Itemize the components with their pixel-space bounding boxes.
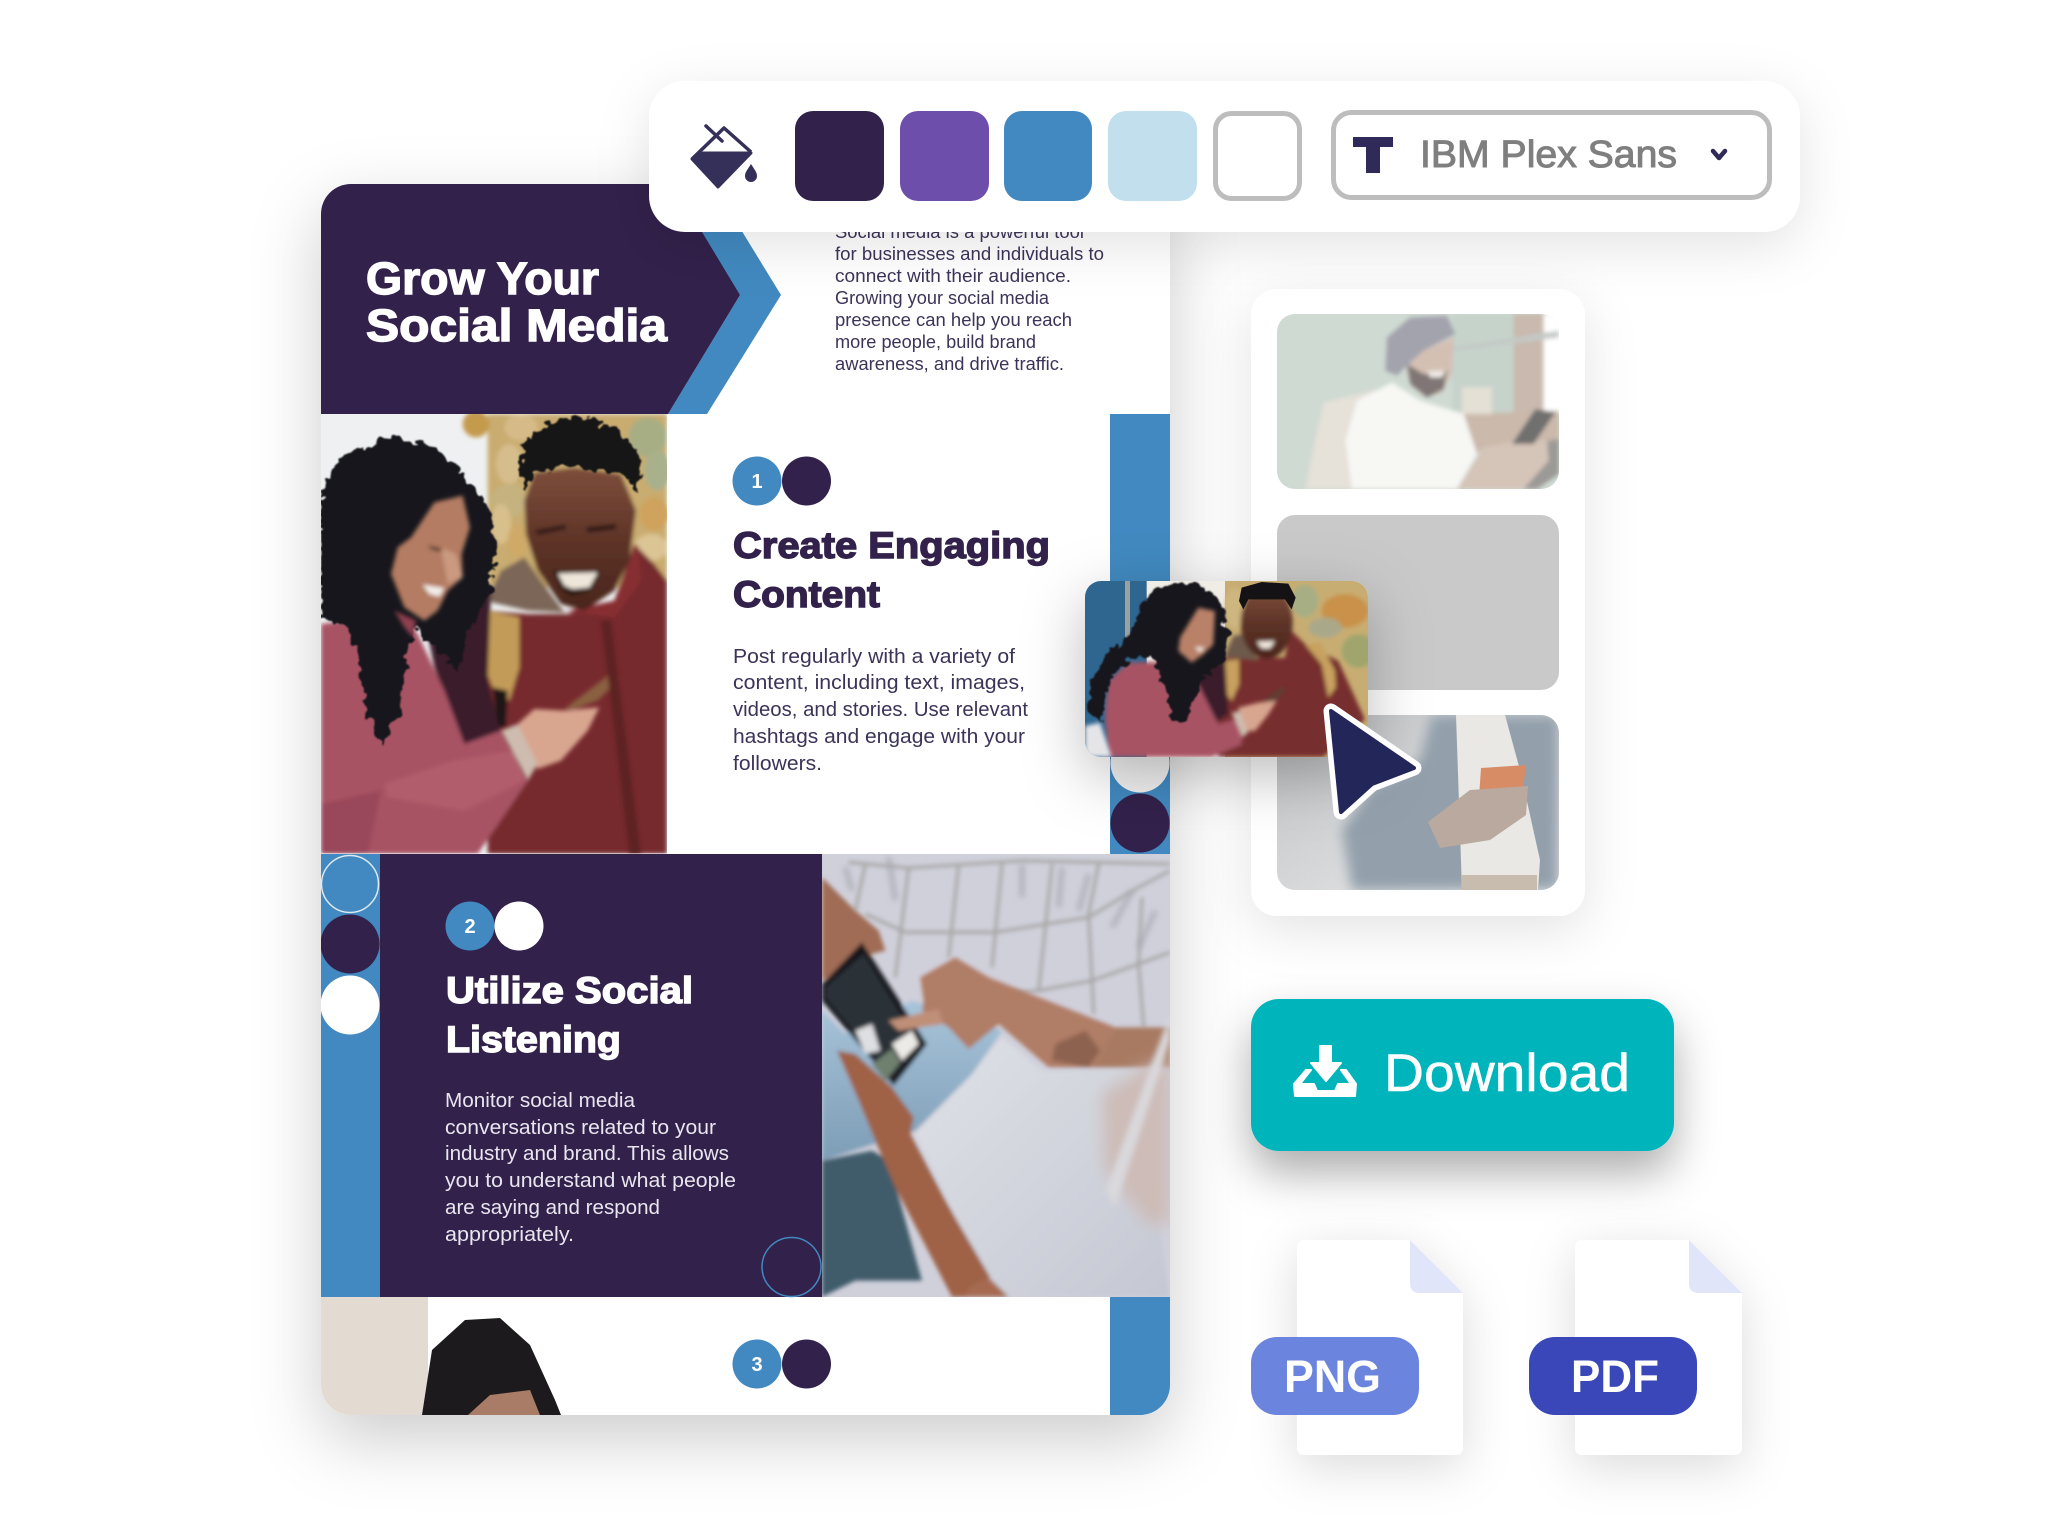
woman's face xyxy=(391,496,470,621)
woman's jacket xyxy=(321,614,528,854)
panel: step 3 xyxy=(321,1297,1170,1415)
gallery photo: man with orange phone xyxy=(1277,715,1559,890)
gallery placeholder xyxy=(1277,515,1559,690)
intro text: presence can help you reach xyxy=(835,309,1072,330)
panel: step 1 text xyxy=(732,456,1050,775)
step 2 body: appropriately. xyxy=(445,1223,574,1246)
intro text xyxy=(835,221,1104,374)
step 1 badge: 1 xyxy=(751,471,763,493)
step 2 heading: Listening xyxy=(446,1019,621,1060)
intro text: connect with their audience. xyxy=(835,265,1071,286)
title: Social Media xyxy=(366,300,668,351)
icon: cursor arrow xyxy=(1331,711,1414,812)
step 2 body xyxy=(445,1089,736,1246)
man's face xyxy=(524,467,636,611)
step 2 heading xyxy=(446,970,693,1060)
step 2 body: conversations related to your xyxy=(445,1116,716,1139)
outline circle xyxy=(762,1238,821,1296)
intro text: awareness, and drive traffic. xyxy=(835,353,1064,374)
font dropdown xyxy=(1334,112,1770,198)
man's hoodie xyxy=(484,543,667,854)
step 1 body xyxy=(733,645,1028,775)
title: Grow Your xyxy=(366,253,599,304)
step 2 badge xyxy=(446,902,544,950)
intro text: for businesses and individuals to xyxy=(835,243,1104,264)
step 1 heading: Create Engaging xyxy=(733,525,1050,566)
header chevron xyxy=(321,184,781,414)
step 1 body: followers. xyxy=(733,752,822,775)
PDF file icon: PDF xyxy=(1571,1351,1659,1402)
colour swatches xyxy=(795,111,1300,201)
panel: step 2 xyxy=(380,854,822,1297)
step 1 badge xyxy=(732,456,831,506)
PDF file icon xyxy=(1529,1240,1742,1455)
poster: social media infographic xyxy=(320,184,1170,1415)
step 1 body: Post regularly with a variety of xyxy=(733,645,1015,668)
icon: paint bucket xyxy=(692,126,757,187)
intro text: more people, build brand xyxy=(835,331,1036,352)
step 1 body: content, including text, images, xyxy=(733,671,1025,694)
step 2 heading: Utilize Social xyxy=(446,970,693,1011)
step 3 badge: 3 xyxy=(751,1354,763,1376)
PNG badge xyxy=(1251,1337,1419,1415)
lower blue strip xyxy=(1110,1297,1170,1415)
font dropdown: IBM Plex Sans xyxy=(1420,134,1677,176)
gallery photo: man in turban xyxy=(1277,314,1564,489)
step 1 heading: Content xyxy=(733,574,880,615)
left blue strip with circles xyxy=(320,854,380,1297)
intro text: Social media is a powerful tool xyxy=(835,221,1084,242)
photo: woman with dark hair xyxy=(321,1297,561,1415)
step 1 body: hashtags and engage with your xyxy=(733,725,1025,748)
man's hair xyxy=(518,417,641,494)
step 2 body: you to understand what people xyxy=(445,1169,736,1192)
photo: hands holding phone xyxy=(822,854,1170,1297)
step 1 heading xyxy=(734,530,1048,608)
intro text: Growing your social media xyxy=(835,287,1050,308)
right blue strip with circles xyxy=(1110,414,1170,854)
photo: couple looking at phone xyxy=(321,411,671,854)
download button xyxy=(1251,999,1674,1151)
step 2 badge: 2 xyxy=(464,916,476,938)
step 3 badge xyxy=(732,1340,831,1388)
download button: Download xyxy=(1384,1044,1630,1103)
woman's hair xyxy=(321,437,496,747)
floating photo: couple looking at phone xyxy=(1085,581,1375,757)
shadowed area behind the woman xyxy=(426,592,501,746)
step 1 body: videos, and stories. Use relevant xyxy=(733,698,1028,721)
step 2 body: industry and brand. This allows xyxy=(445,1142,729,1165)
toolbar xyxy=(649,81,1800,232)
hand and phone xyxy=(564,671,619,709)
step 2 body: are saying and respond xyxy=(445,1196,660,1219)
step 2 body: Monitor social media xyxy=(445,1089,636,1112)
panel: image gallery xyxy=(1251,289,1585,916)
PDF badge xyxy=(1529,1337,1697,1415)
icon: download tray xyxy=(1294,1046,1356,1096)
title xyxy=(366,262,668,342)
PNG file icon xyxy=(1251,1240,1463,1455)
PNG file icon: PNG xyxy=(1284,1351,1381,1402)
